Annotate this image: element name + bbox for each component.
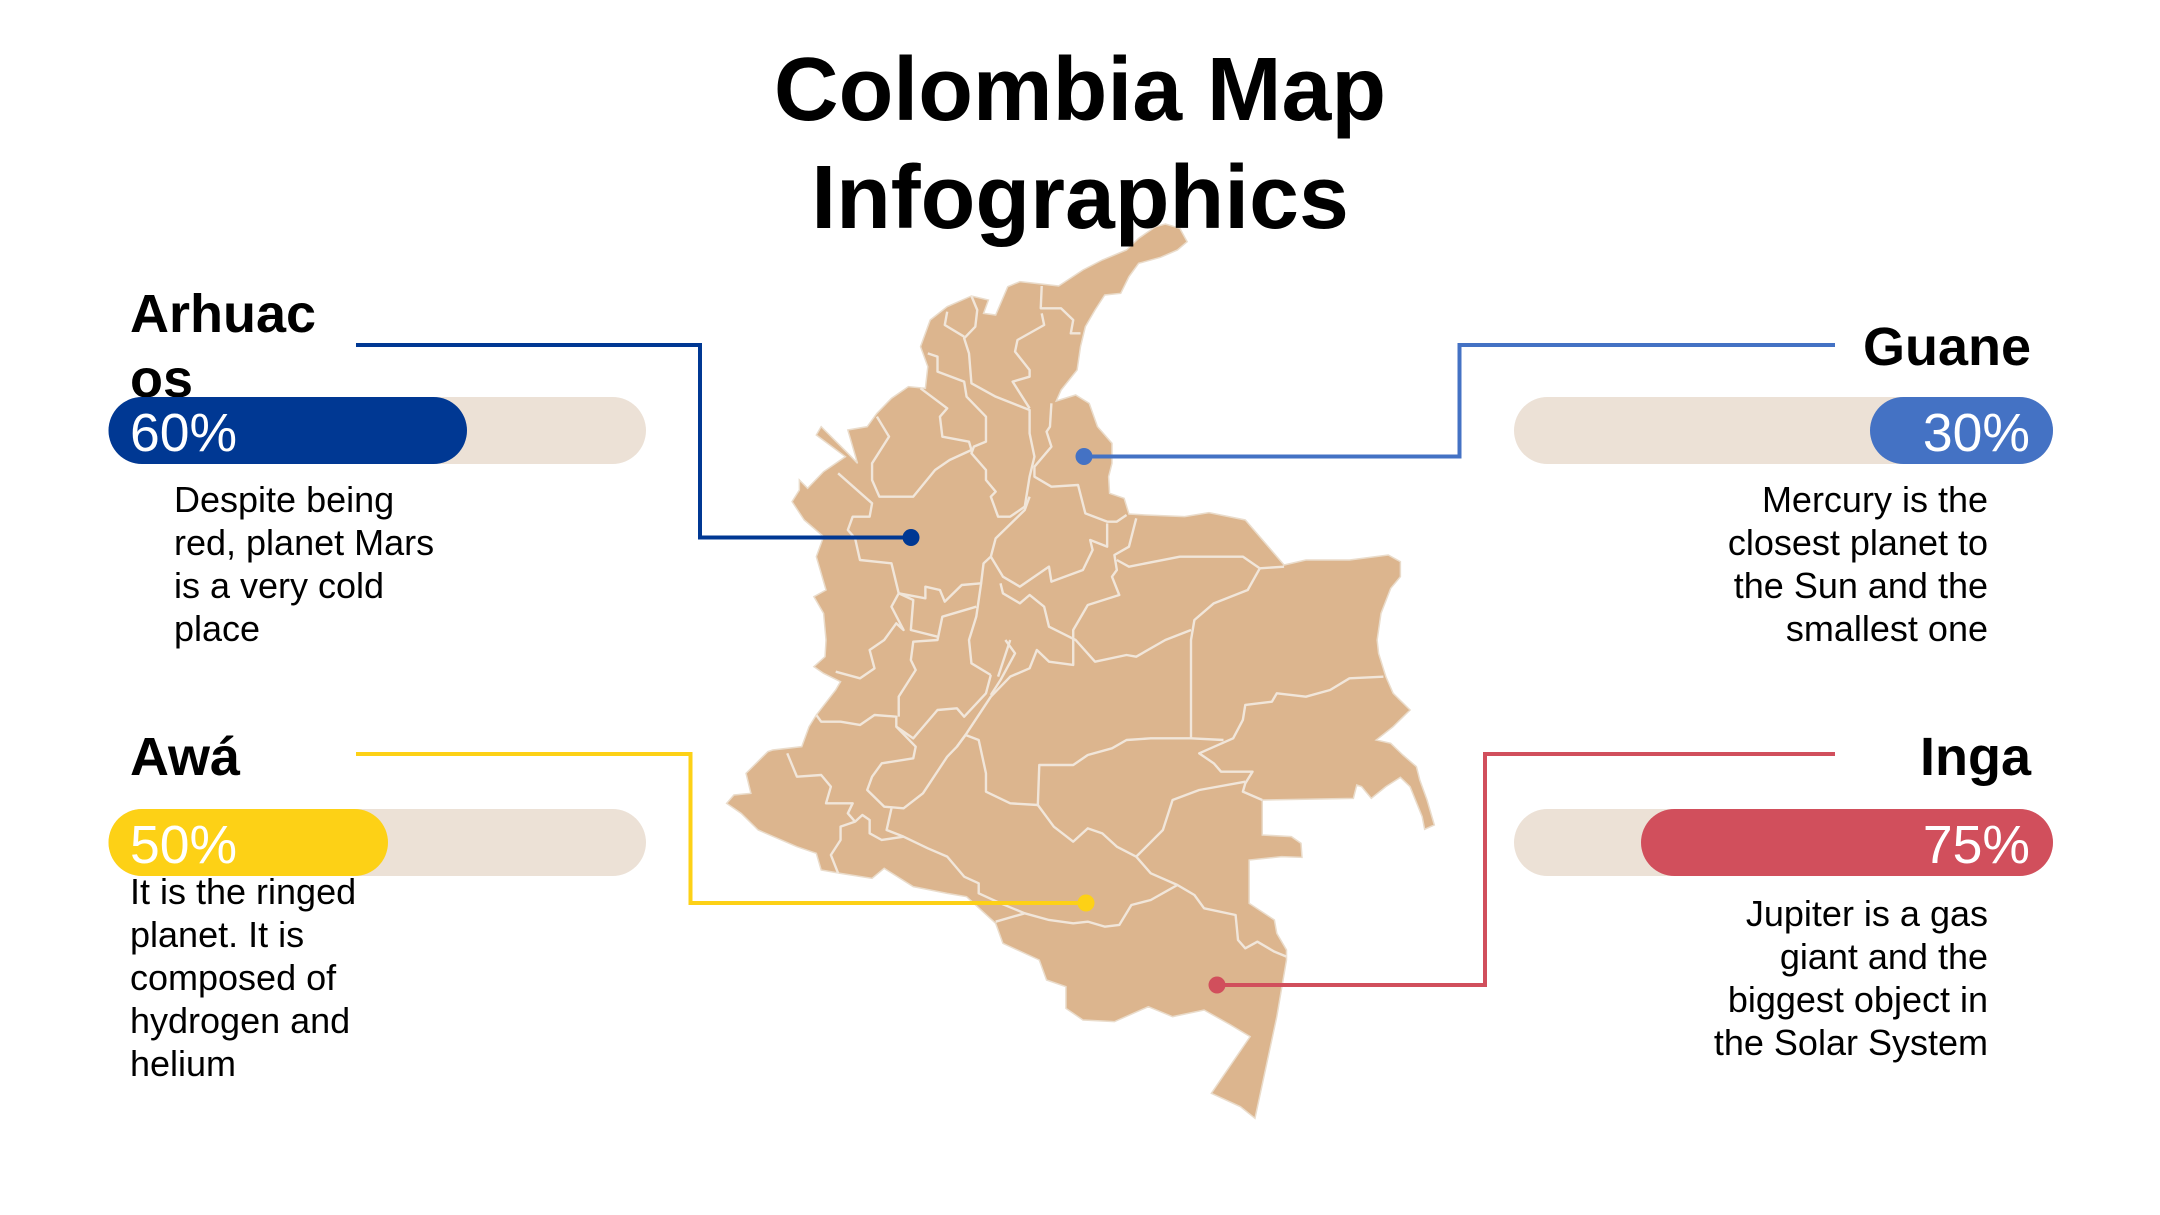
heading: Awá: Awá (130, 727, 241, 787)
text block: Arhuacos description: is a very cold (174, 565, 384, 606)
map: Colombia (727, 224, 1434, 1118)
text block: Guane description: closest planet to (1728, 522, 1988, 563)
heading: Arhuacos (130, 284, 316, 409)
text block: Awá description: composed of (130, 957, 337, 998)
connector: Guane (1076, 345, 1835, 465)
progress bar: 60% (108, 397, 646, 464)
progress bar: 30% (1514, 397, 2053, 464)
text block: Arhuacos description: red, planet Mars (174, 522, 434, 563)
text block: Inga description: Jupiter is a gas (1746, 893, 1988, 934)
progress bar: 75% (1514, 809, 2053, 876)
text block: Inga description: biggest object in (1728, 979, 1988, 1020)
heading: Arhuacos: os (130, 349, 193, 409)
progress bar: 50% (108, 809, 646, 876)
heading: Inga: Inga (1920, 727, 2032, 787)
text block: Arhuacos description: Despite being (174, 479, 394, 520)
panel: Inga (1514, 727, 2053, 1063)
text block: Awá description: It is the ringed (130, 871, 356, 912)
panel: Awá (108, 727, 646, 1084)
connector: Arhuacos (356, 345, 920, 546)
text block: Awá description: planet. It is (130, 914, 304, 955)
panel: Guane (1514, 317, 2053, 649)
title (774, 39, 1386, 247)
heading: Guane: Guane (1863, 317, 2031, 377)
title: Colombia Map (774, 39, 1386, 139)
text block: Arhuacos description (174, 479, 434, 649)
text block: Arhuacos description: place (174, 608, 260, 649)
progress bar: 60%: 60% (130, 404, 237, 463)
text block: Guane description (1728, 479, 1988, 649)
text block: Inga description: giant and the (1780, 936, 1988, 977)
text block: Guane description: the Sun and the (1734, 565, 1988, 606)
text block: Guane description: Mercury is the (1762, 479, 1988, 520)
text block: Guane description: smallest one (1786, 608, 1988, 649)
connector: Inga (1208, 754, 1835, 994)
text block: Inga description (1714, 893, 1988, 1063)
text block: Awá description: helium (130, 1043, 236, 1084)
heading: Arhuacos: Arhuac (130, 284, 316, 344)
text block: Awá description (130, 871, 356, 1084)
panel: Arhuacos (108, 284, 646, 649)
progress bar: 75%: 75% (1923, 816, 2030, 875)
title: Infographics (811, 147, 1349, 247)
text block: Awá description: hydrogen and (130, 1000, 350, 1041)
progress bar: 30%: 30% (1923, 404, 2030, 463)
text block: Inga description: the Solar System (1714, 1022, 1988, 1063)
connector: Awá (356, 754, 1094, 912)
progress bar: 50%: 50% (130, 816, 237, 875)
